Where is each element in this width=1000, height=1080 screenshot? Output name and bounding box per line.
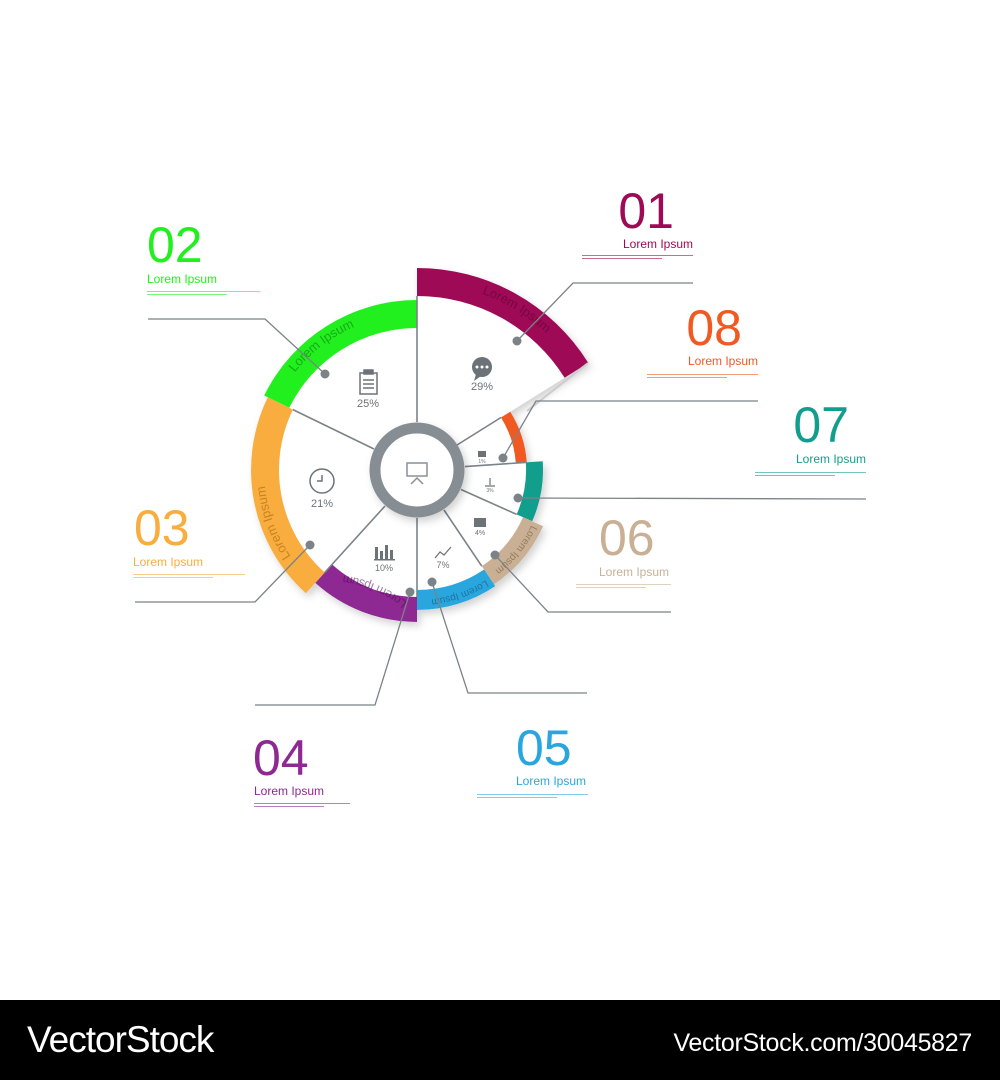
footer bar: VectorStock [27, 1019, 215, 1060]
center ring [375, 428, 459, 512]
label 05: 05 [516, 720, 572, 776]
band 05 [417, 570, 495, 610]
icon: bar chart [374, 545, 395, 560]
segment icons and percentages [310, 357, 495, 573]
label 06: 06 [599, 510, 655, 566]
label 06: Lorem Ipsum [599, 565, 669, 579]
label 08 [647, 300, 758, 378]
label 01 [582, 183, 693, 259]
icon: chat [472, 357, 492, 381]
segment icons and percentages: 25% [357, 398, 379, 410]
label 08: Lorem Ipsum [688, 354, 758, 368]
label 07 [755, 397, 866, 476]
footer bar [0, 1000, 1000, 1080]
icon: folder [474, 518, 486, 527]
band labels: Lorem Ipsum [258, 486, 290, 560]
label 03: Lorem Ipsum [133, 555, 203, 569]
label 01: 01 [618, 183, 674, 239]
label 05 [477, 720, 588, 798]
icon: line chart [435, 547, 451, 558]
icon: presentation board [407, 463, 427, 484]
icon: lock [478, 451, 486, 457]
icon: clock [310, 469, 334, 493]
band labels: Lorem Ipsum [496, 526, 538, 574]
footer bar: VectorStock.com/30045827 [673, 1029, 972, 1057]
band 08 [501, 412, 527, 463]
pie chart [250, 268, 592, 629]
label 07: 07 [793, 397, 849, 453]
band labels: Lorem Ipsum [288, 321, 354, 372]
label 04: 04 [253, 730, 309, 786]
label 01: Lorem Ipsum [623, 237, 693, 251]
segment icons and percentages: 29% [471, 381, 493, 393]
label 07: Lorem Ipsum [796, 452, 866, 466]
label 08: 08 [686, 300, 742, 356]
band 06 [482, 517, 543, 584]
segment icons and percentages: 7% [436, 560, 450, 570]
segment icons and percentages: 10% [375, 563, 393, 573]
band labels: Lorem Ipsum [344, 576, 406, 608]
label 04: Lorem Ipsum [254, 784, 324, 798]
label 03: 03 [134, 500, 190, 556]
label 02: Lorem Ipsum [147, 272, 217, 286]
segment icons and percentages: 4% [475, 530, 485, 537]
leader lines and dots [135, 283, 866, 705]
segment icons and percentages: 1% [478, 459, 486, 465]
label 02: 02 [147, 217, 203, 273]
band labels [258, 286, 550, 608]
band 04 [315, 564, 417, 622]
band 07 [517, 461, 543, 521]
label 02 [147, 217, 260, 295]
label 06 [576, 510, 671, 588]
segment icons and percentages: 3% [486, 488, 494, 494]
segment icons and percentages: 21% [311, 498, 333, 510]
band 01 [417, 268, 588, 378]
icon: download [485, 478, 495, 486]
band labels: Lorem Ipsum [432, 580, 489, 604]
band labels: Lorem Ipsum [483, 286, 550, 333]
icon: clipboard [360, 370, 377, 394]
band 03 [251, 397, 325, 593]
label 04 [253, 730, 350, 807]
label 03 [133, 500, 245, 578]
band 02 [264, 300, 417, 408]
label 05: Lorem Ipsum [516, 774, 586, 788]
